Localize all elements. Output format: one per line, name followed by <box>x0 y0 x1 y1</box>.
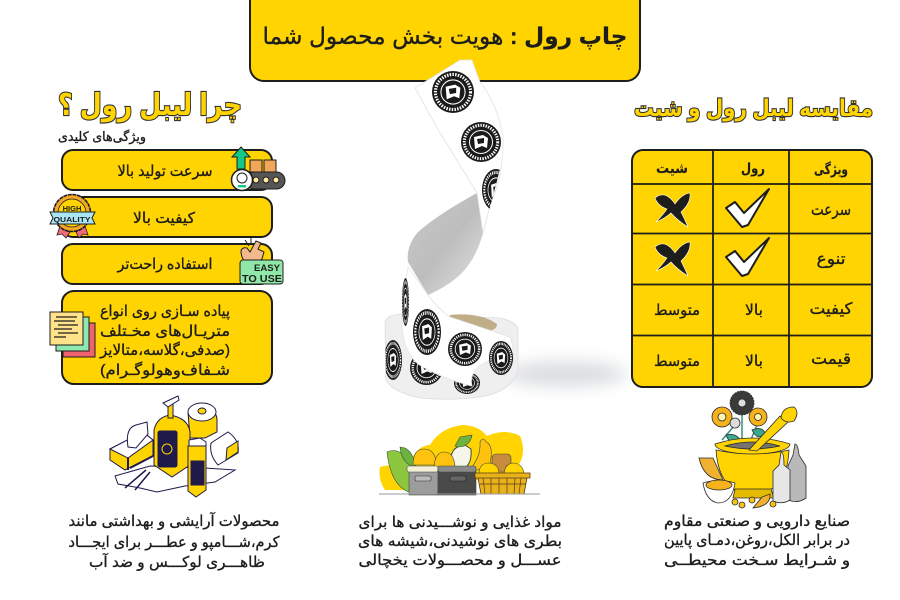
text: cosmetics: کرم،شـــامپو و عطـــر برای ایجـــاد <box>68 534 280 552</box>
text: cosmetics: محصولات آرایشی و بهداشتی مانند <box>68 512 280 530</box>
feature column: سرعت <box>811 202 851 220</box>
illustration: food and drinks <box>379 425 540 495</box>
text: pharma: صنایع دارویی و صنعتی مقاوم <box>664 513 850 530</box>
text: cosmetics: ظاهـــری لوکـــس و ضد آب <box>89 553 265 571</box>
title: چاپ رول : هویت بخش محصول شما <box>262 23 628 50</box>
roll body <box>385 314 518 399</box>
table header: رول <box>741 160 765 177</box>
roll values: بالا <box>745 302 763 319</box>
text: pharma: و شـرایط سـخت محیطــی <box>664 552 850 569</box>
sheet values: متوسط <box>654 353 700 370</box>
card: high quality <box>50 194 272 238</box>
illustration: pharma mortar <box>699 391 806 508</box>
sheet values <box>654 302 700 370</box>
card: materials: متریـال‌های مخـتلف <box>100 323 230 340</box>
card: ease of use <box>62 238 283 285</box>
card: materials: (صدفی،گلاسه،متالایز <box>99 341 230 359</box>
table header: ویژگی <box>814 161 848 178</box>
icon: check variety <box>726 238 769 276</box>
icon: easy to use <box>240 238 283 285</box>
text: food and drinks: مواد غذایی و نوشـــیدنی ها برای <box>358 514 562 531</box>
icon: cross variety <box>655 242 690 276</box>
table header: شیت <box>656 160 688 176</box>
icon: check speed <box>726 189 769 227</box>
icon: paper stack <box>50 312 95 357</box>
icon: quality badge: HIGH <box>63 204 81 213</box>
icon: easy to use: TO USE <box>242 274 282 285</box>
card: ease of use: استفاده راحت‌تر <box>117 256 212 273</box>
feature column: قیمت <box>811 351 851 368</box>
card: production speed: سرعت تولید بالا <box>118 163 212 180</box>
icon: cross speed <box>655 193 690 227</box>
card: materials: پیاده سـازی روی انواع <box>100 303 230 321</box>
feature column: تنوع <box>816 251 846 269</box>
comparison table <box>632 150 872 387</box>
text: food and drinks: عســـل و محصـــولات یخچالی <box>358 552 562 569</box>
icon: quality badge <box>50 194 95 238</box>
icon: easy to use: EASY <box>254 263 281 274</box>
text: pharma: در برابر الکل،روغن،دمـای پایین <box>664 532 850 550</box>
header banner <box>250 0 640 81</box>
illustration: cosmetics <box>110 396 238 497</box>
sheet values: متوسط <box>654 302 700 319</box>
roll values <box>745 302 763 370</box>
text: food and drinks: بطری های نوشیدنی،شیشه های <box>358 533 562 550</box>
label roll photo <box>384 60 627 399</box>
table header <box>656 160 848 178</box>
card: production speed <box>62 147 285 190</box>
lower strip <box>402 267 513 386</box>
icon: quality badge: QUALITY <box>54 215 90 224</box>
gray back of strip <box>408 193 488 295</box>
roll values: بالا <box>745 353 763 370</box>
card: materials: شـفاف‌وهولوگـرام) <box>100 361 230 379</box>
text: pharma <box>664 513 850 569</box>
card: high quality: کیفیت بالا <box>133 210 196 227</box>
feature column <box>810 202 853 368</box>
subheading: key features: ویژگی‌های کلیدی <box>58 129 146 145</box>
text: food and drinks <box>358 514 562 569</box>
feature column: کیفیت <box>810 301 853 318</box>
card: materials <box>50 291 272 384</box>
roll shadow <box>503 361 627 387</box>
upper strip <box>415 60 503 233</box>
heading: why roll label: چرا لیبل رول ؟ <box>58 89 242 123</box>
text: cosmetics <box>68 512 280 571</box>
icon: conveyor <box>232 147 285 190</box>
